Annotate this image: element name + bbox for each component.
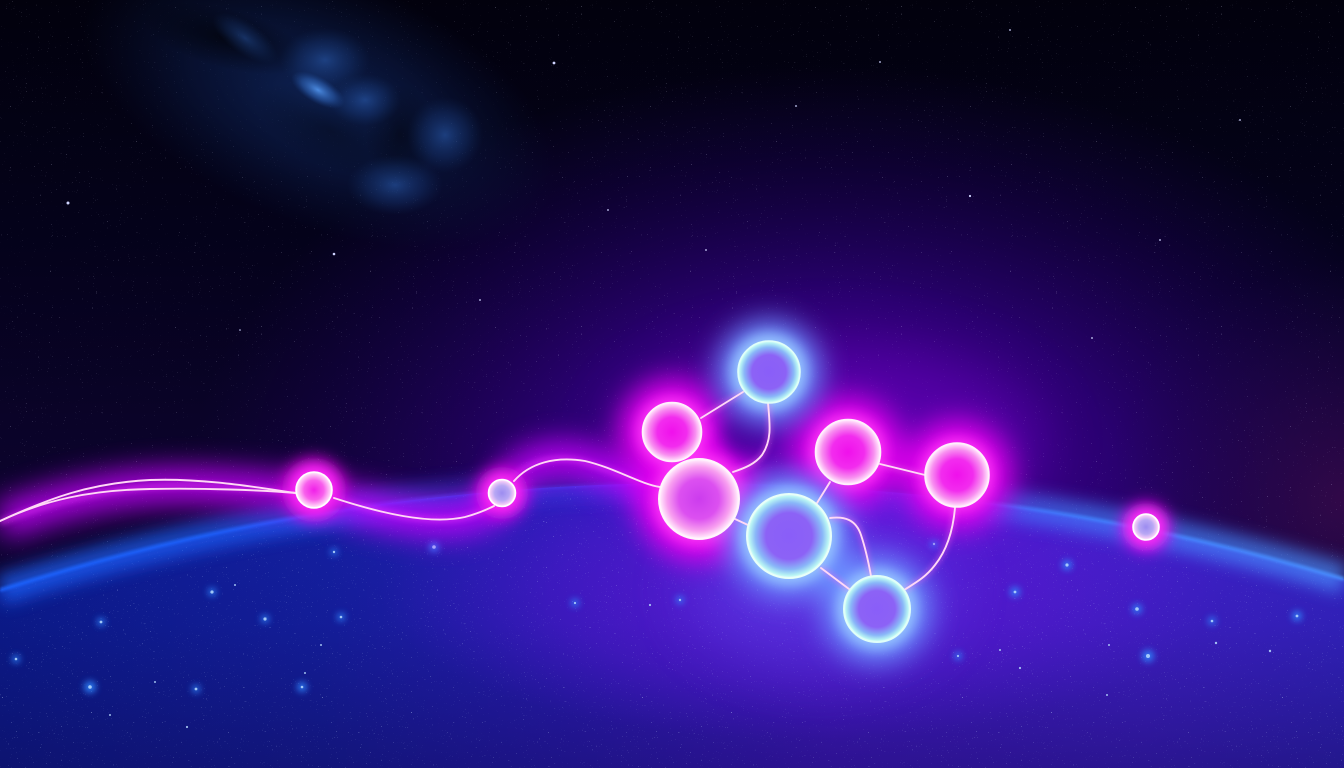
glow: small nodes <box>282 458 1170 551</box>
node: pink left <box>642 402 702 462</box>
link: pink mid to pink right <box>880 464 925 475</box>
strand: incoming upper <box>0 480 296 521</box>
node: big pink <box>659 459 739 539</box>
halo behind network <box>615 340 1045 665</box>
city lights cores <box>15 543 1298 728</box>
node: pink middle <box>816 420 880 484</box>
node: small pink left <box>296 472 332 508</box>
link: big blue to blue bottom straight <box>821 568 849 589</box>
node: blue top <box>738 341 800 403</box>
connector lines <box>0 392 955 590</box>
glow: blue nodes tight <box>731 334 917 649</box>
atmosphere rim <box>0 483 1344 590</box>
strand tight glow <box>0 459 660 522</box>
strand: incoming lower <box>0 489 296 521</box>
link: big blue to pink mid <box>817 482 830 503</box>
glow: blue nodes wide <box>717 320 931 663</box>
glow: pink nodes wide <box>620 380 1011 561</box>
strand: node 2 to big pink node <box>514 459 660 487</box>
milky way nebula <box>41 0 599 310</box>
planet surface star dust <box>0 480 1344 768</box>
planet violet glow <box>450 501 1088 712</box>
link: big blue to blue bottom curved <box>830 518 871 576</box>
star field: sky <box>0 0 1344 590</box>
glow: pink nodes tight <box>293 397 1163 545</box>
node: blue bottom <box>844 576 910 642</box>
node: small pale <box>488 480 516 506</box>
link: blue top to big pink <box>733 403 770 472</box>
planet <box>0 484 1344 768</box>
link: pink left to blue top <box>701 392 743 418</box>
node: pink right <box>925 443 989 507</box>
connector lines glow <box>701 392 955 590</box>
strand: node 1 to node 2 <box>334 498 494 520</box>
bright stars <box>66 29 1241 339</box>
strand wide glow <box>0 459 660 522</box>
shadow gap between nodes <box>723 410 767 454</box>
node: isolated right <box>1133 514 1159 540</box>
node: big blue <box>747 494 831 578</box>
link: big pink to big blue <box>735 519 748 525</box>
link: pink right to blue bottom <box>904 508 955 590</box>
city lights glow <box>12 540 1302 693</box>
